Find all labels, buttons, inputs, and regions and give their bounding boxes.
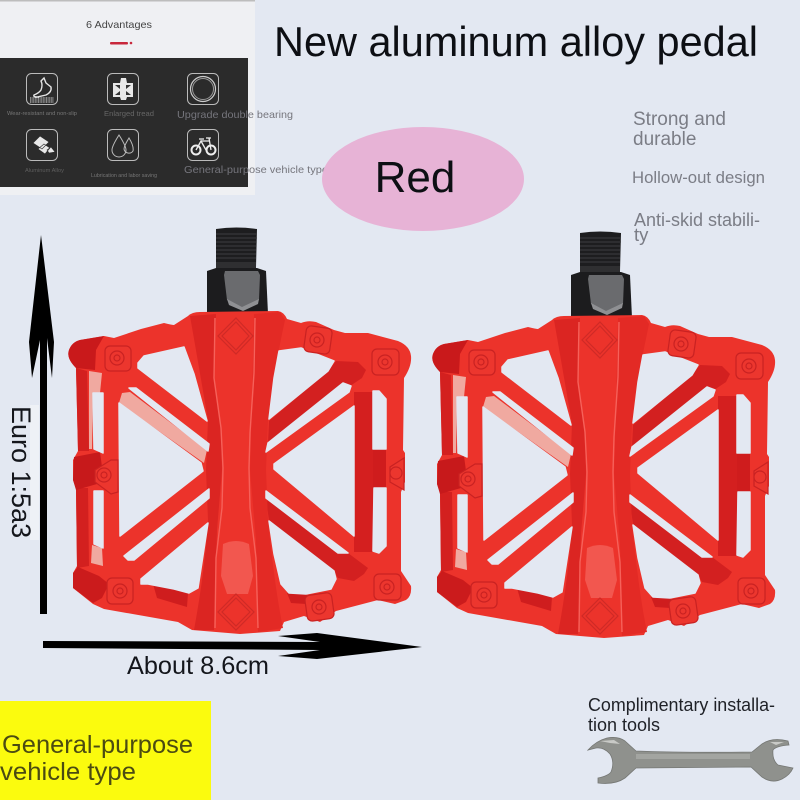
- mounting bolts: [95, 325, 404, 622]
- heading: 6 advantages: 6 Advantages: [86, 19, 152, 31]
- arrow: height: [29, 235, 54, 614]
- icon: pedal: [108, 74, 138, 104]
- dark feature board: [0, 58, 248, 187]
- label: tools: Complimentary installa-: [588, 695, 775, 715]
- central bright patch: [221, 541, 253, 594]
- axle: [207, 228, 268, 314]
- icon: wrench: [588, 737, 793, 783]
- feature labels: Aluminum Alloy: [25, 168, 64, 174]
- colour badge: Red: Red: [375, 153, 455, 202]
- arrow: width: [43, 633, 422, 659]
- icon: double bearing ring: [188, 74, 218, 104]
- callout: general purpose: vehicle type: [0, 758, 136, 786]
- feature list: [632, 109, 765, 245]
- feature list: durable: [633, 129, 696, 150]
- pale inner walls: [89, 371, 207, 566]
- label: tools: tion tools: [588, 715, 660, 735]
- highlights: [214, 318, 258, 628]
- callout: general purpose: General-purpose: [2, 731, 193, 759]
- panel: 6 advantages: [0, 0, 328, 195]
- feature list: Strong and: [633, 109, 726, 130]
- feature list: Anti-skid stabili-: [634, 209, 760, 230]
- cut-outs: [93, 347, 386, 594]
- title: New aluminum alloy pedal: [274, 18, 758, 65]
- feature labels: Wear-resistant and non-slip: [7, 111, 77, 117]
- label: height: Euro 1:5a3: [6, 406, 36, 538]
- feature labels: Lubrication and labor saving: [91, 173, 157, 179]
- icon: foot on tread: [26, 74, 58, 104]
- pale strip behind height label: [30, 405, 39, 540]
- feature list: Hollow-out design: [632, 168, 765, 187]
- callout: general purpose: [0, 701, 211, 800]
- logos: [218, 318, 254, 630]
- label: tools: [588, 695, 775, 735]
- pedal: right: [432, 232, 775, 638]
- pedal body: [68, 311, 411, 634]
- feature labels: General-purpose vehicle type: [184, 164, 328, 176]
- body shading: [68, 312, 386, 632]
- icon: bicycle: [188, 130, 218, 160]
- feature labels: Enlarged tread: [104, 109, 154, 118]
- feature labels: [7, 109, 328, 179]
- icon: aluminum ingots: [26, 130, 58, 160]
- accent dash: [110, 42, 132, 44]
- pedal: left: [68, 228, 411, 634]
- icon: oil drops: [108, 130, 138, 160]
- colour badge: Red: [322, 127, 524, 231]
- feature labels: Upgrade double bearing: [177, 109, 293, 121]
- label: width: About 8.6cm: [127, 652, 269, 680]
- feature list: ty: [634, 224, 649, 245]
